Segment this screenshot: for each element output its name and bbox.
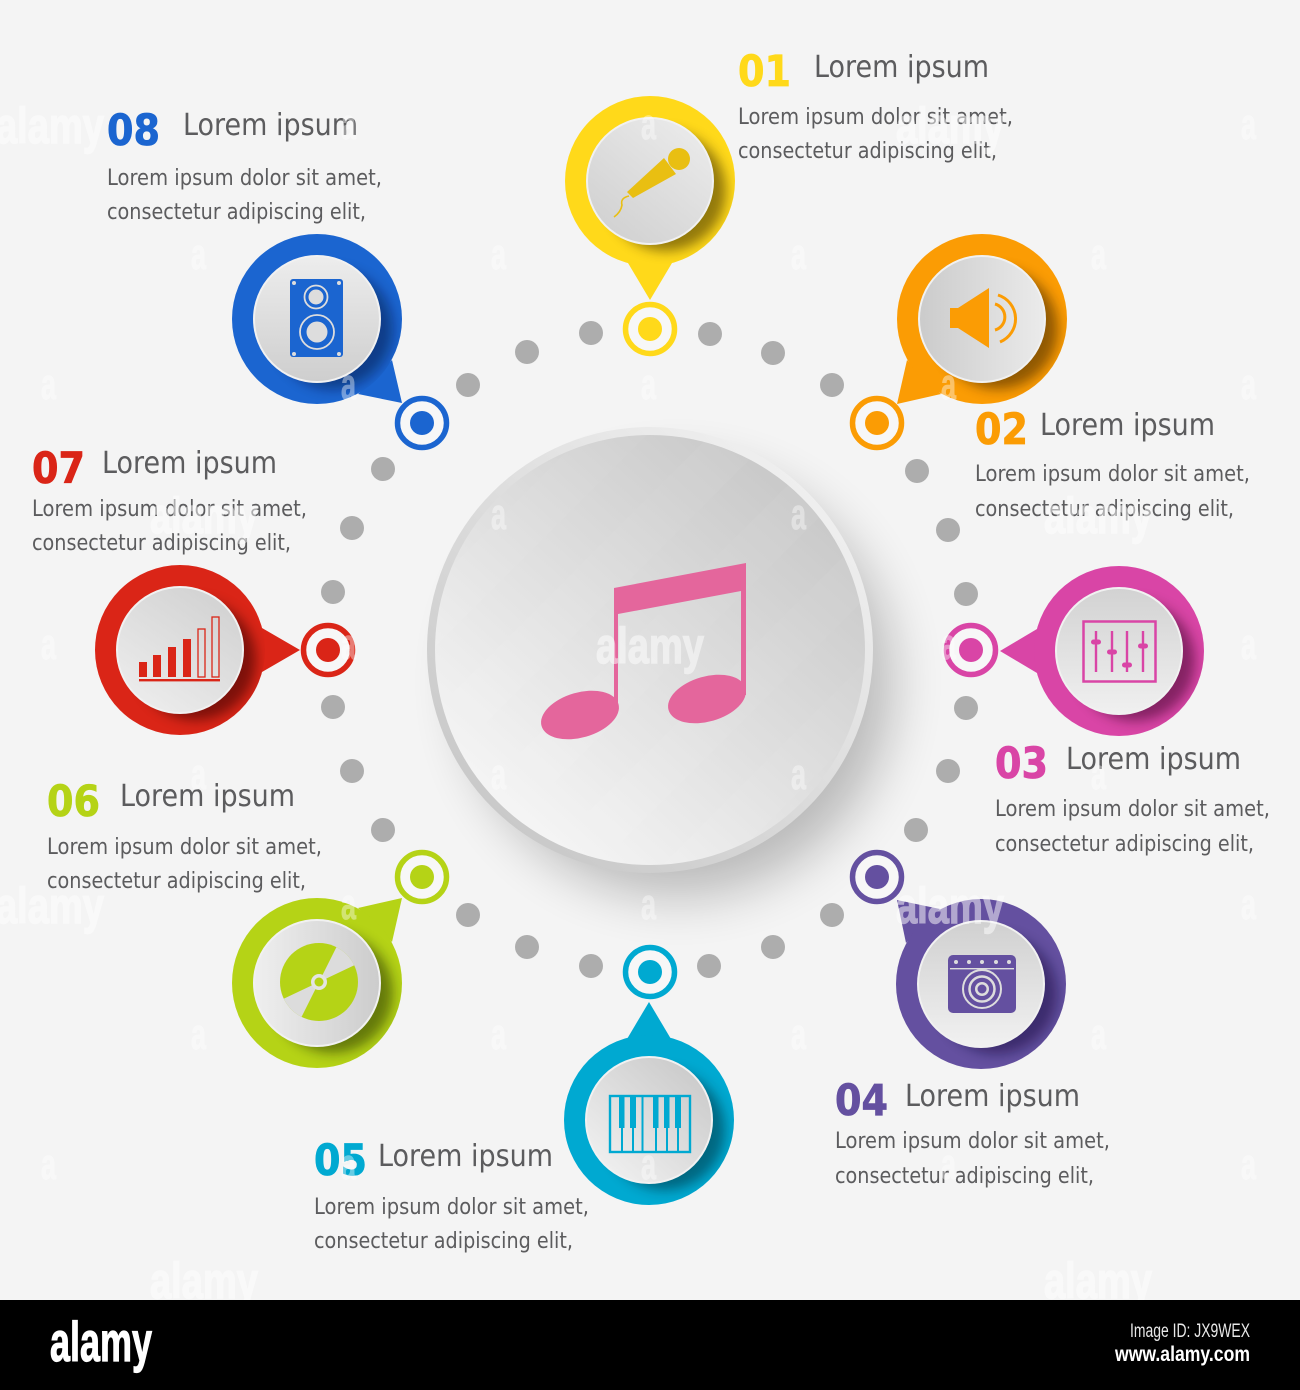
watermark overlay: alamy bbox=[1044, 1253, 1152, 1309]
dotted ring of grey dots bbox=[321, 321, 978, 978]
footer bar bbox=[0, 1300, 1300, 1390]
footer url: www.alamy.com bbox=[1114, 1343, 1250, 1366]
text block 01 bbox=[738, 47, 1013, 164]
watermark overlay: alamy bbox=[596, 618, 704, 674]
text block 08: Lorem ipsum dolor sit amet, bbox=[107, 165, 382, 191]
icon: music note bbox=[535, 563, 752, 748]
text block 06: consectetur adipiscing elit, bbox=[47, 868, 306, 894]
text block 07: 07 bbox=[32, 444, 85, 494]
watermark overlay: alamy bbox=[896, 878, 1004, 934]
text block 04: 04 bbox=[835, 1076, 888, 1126]
text block 07: Lorem ipsum dolor sit amet, bbox=[32, 496, 307, 522]
text block 05: 05 bbox=[314, 1136, 367, 1186]
watermark overlay: a bbox=[1241, 100, 1256, 149]
text block 04: consectetur adipiscing elit, bbox=[835, 1163, 1094, 1189]
text block 05: Lorem ipsum dolor sit amet, bbox=[314, 1194, 589, 1220]
watermark overlay: alamy bbox=[896, 98, 1004, 154]
watermark overlay: a bbox=[1241, 1140, 1256, 1189]
watermark overlay: a bbox=[1091, 230, 1106, 279]
icon: bar chart bbox=[139, 617, 220, 681]
text block 03: consectetur adipiscing elit, bbox=[995, 831, 1254, 857]
watermark overlay: a bbox=[1241, 620, 1256, 669]
watermark overlay: a bbox=[791, 750, 806, 799]
text block 06: Lorem ipsum bbox=[120, 779, 295, 814]
text block 06: Lorem ipsum dolor sit amet, bbox=[47, 834, 322, 860]
connector ring 02 bbox=[852, 398, 902, 448]
pin 05: piano keys, cyan bbox=[564, 948, 734, 1205]
watermark overlay: alamy bbox=[1044, 488, 1152, 544]
text block 07 bbox=[32, 444, 307, 556]
text block 08: 08 bbox=[107, 106, 160, 156]
connector ring 08 bbox=[398, 398, 446, 448]
text block 02: Lorem ipsum bbox=[1040, 408, 1215, 443]
footer logo: alamy bbox=[50, 1310, 152, 1373]
icon: speaker cabinet bbox=[290, 279, 343, 357]
connector ring 04 bbox=[852, 852, 902, 902]
watermark overlay: a bbox=[491, 750, 506, 799]
text block 05: consectetur adipiscing elit, bbox=[314, 1228, 573, 1254]
text block 01: Lorem ipsum dolor sit amet, bbox=[738, 104, 1013, 130]
text block 02 bbox=[975, 405, 1250, 522]
icon: loudspeaker bbox=[950, 288, 1016, 348]
icon: microphone bbox=[614, 148, 690, 217]
text block 06: 06 bbox=[47, 777, 100, 827]
text block 03 bbox=[995, 739, 1270, 857]
watermark overlay: a bbox=[641, 880, 656, 929]
connector ring 07 bbox=[304, 626, 352, 674]
pin 01: microphone, yellow bbox=[565, 96, 735, 354]
text block 03: Lorem ipsum bbox=[1066, 742, 1241, 777]
text block 04 bbox=[835, 1076, 1110, 1189]
watermark overlay: a bbox=[641, 360, 656, 409]
watermark overlay: a bbox=[491, 490, 506, 539]
watermark overlay: a bbox=[191, 230, 206, 279]
watermark overlay: a bbox=[191, 1010, 206, 1059]
watermark overlay: a bbox=[491, 1010, 506, 1059]
pin 08: speaker cabinet, blue bbox=[232, 234, 446, 448]
watermark overlay: a bbox=[41, 1140, 56, 1189]
text block 06 bbox=[47, 777, 322, 894]
connector ring 01 bbox=[626, 304, 674, 354]
text block 08 bbox=[107, 106, 382, 225]
connector ring 03 bbox=[946, 626, 996, 674]
watermark overlay: a bbox=[791, 1010, 806, 1059]
watermark overlay: a bbox=[791, 230, 806, 279]
text block 01: consectetur adipiscing elit, bbox=[738, 138, 997, 164]
watermark overlay: a bbox=[341, 100, 356, 149]
central disc with music note bbox=[427, 427, 892, 896]
pin 07: bar chart, red bbox=[95, 565, 352, 735]
connector ring 05 bbox=[626, 948, 674, 996]
watermark overlay: a bbox=[1091, 750, 1106, 799]
watermark overlay: a bbox=[1091, 1010, 1106, 1059]
pin 04: amplifier, purple bbox=[852, 852, 1066, 1069]
text block 02: 02 bbox=[975, 405, 1028, 455]
watermark overlay: a bbox=[941, 360, 956, 409]
watermark overlay: a bbox=[341, 880, 356, 929]
watermark overlay: a bbox=[41, 620, 56, 669]
pin 02: speaker, orange bbox=[852, 234, 1067, 448]
pin 03: mixer, magenta bbox=[946, 566, 1204, 736]
watermark overlay: alamy bbox=[0, 98, 104, 154]
icon: mixer sliders bbox=[1084, 622, 1156, 682]
watermark overlay: a bbox=[341, 360, 356, 409]
text block 08: consectetur adipiscing elit, bbox=[107, 199, 366, 225]
watermark overlay: a bbox=[791, 490, 806, 539]
text block 01: 01 bbox=[738, 47, 791, 97]
connector ring 06 bbox=[398, 852, 446, 902]
text block 07: Lorem ipsum bbox=[102, 446, 277, 481]
watermark overlay: a bbox=[341, 620, 356, 669]
icon: guitar amplifier bbox=[948, 955, 1016, 1013]
watermark overlay: a bbox=[941, 620, 956, 669]
watermark overlay: a bbox=[1241, 360, 1256, 409]
text block 02: Lorem ipsum dolor sit amet, bbox=[975, 461, 1250, 487]
watermark overlay: alamy bbox=[150, 488, 258, 544]
watermark overlay: a bbox=[641, 1140, 656, 1189]
text block 05: Lorem ipsum bbox=[378, 1139, 553, 1174]
icon: compact disc bbox=[279, 942, 359, 1022]
pin 06: compact disc, lime bbox=[232, 852, 446, 1068]
watermark overlay: alamy bbox=[0, 878, 104, 934]
watermark overlay: a bbox=[191, 750, 206, 799]
text block 01: Lorem ipsum bbox=[814, 50, 989, 85]
watermark overlay: a bbox=[641, 100, 656, 149]
footer image id: Image ID: JX9WEX bbox=[1130, 1321, 1250, 1342]
text block 08: Lorem ipsum bbox=[183, 108, 358, 143]
watermark overlay: a bbox=[491, 230, 506, 279]
watermark overlay: a bbox=[1241, 880, 1256, 929]
watermark overlay: alamy bbox=[150, 1253, 258, 1309]
text block 03: 03 bbox=[995, 739, 1048, 789]
text block 04: Lorem ipsum bbox=[905, 1079, 1080, 1114]
watermark overlay: a bbox=[941, 1140, 956, 1189]
watermark overlay: a bbox=[341, 1140, 356, 1189]
text block 04: Lorem ipsum dolor sit amet, bbox=[835, 1128, 1110, 1154]
text block 05 bbox=[314, 1136, 589, 1254]
text block 07: consectetur adipiscing elit, bbox=[32, 530, 291, 556]
icon: piano keyboard bbox=[610, 1096, 690, 1152]
watermark overlay: a bbox=[41, 360, 56, 409]
text block 02: consectetur adipiscing elit, bbox=[975, 496, 1234, 522]
